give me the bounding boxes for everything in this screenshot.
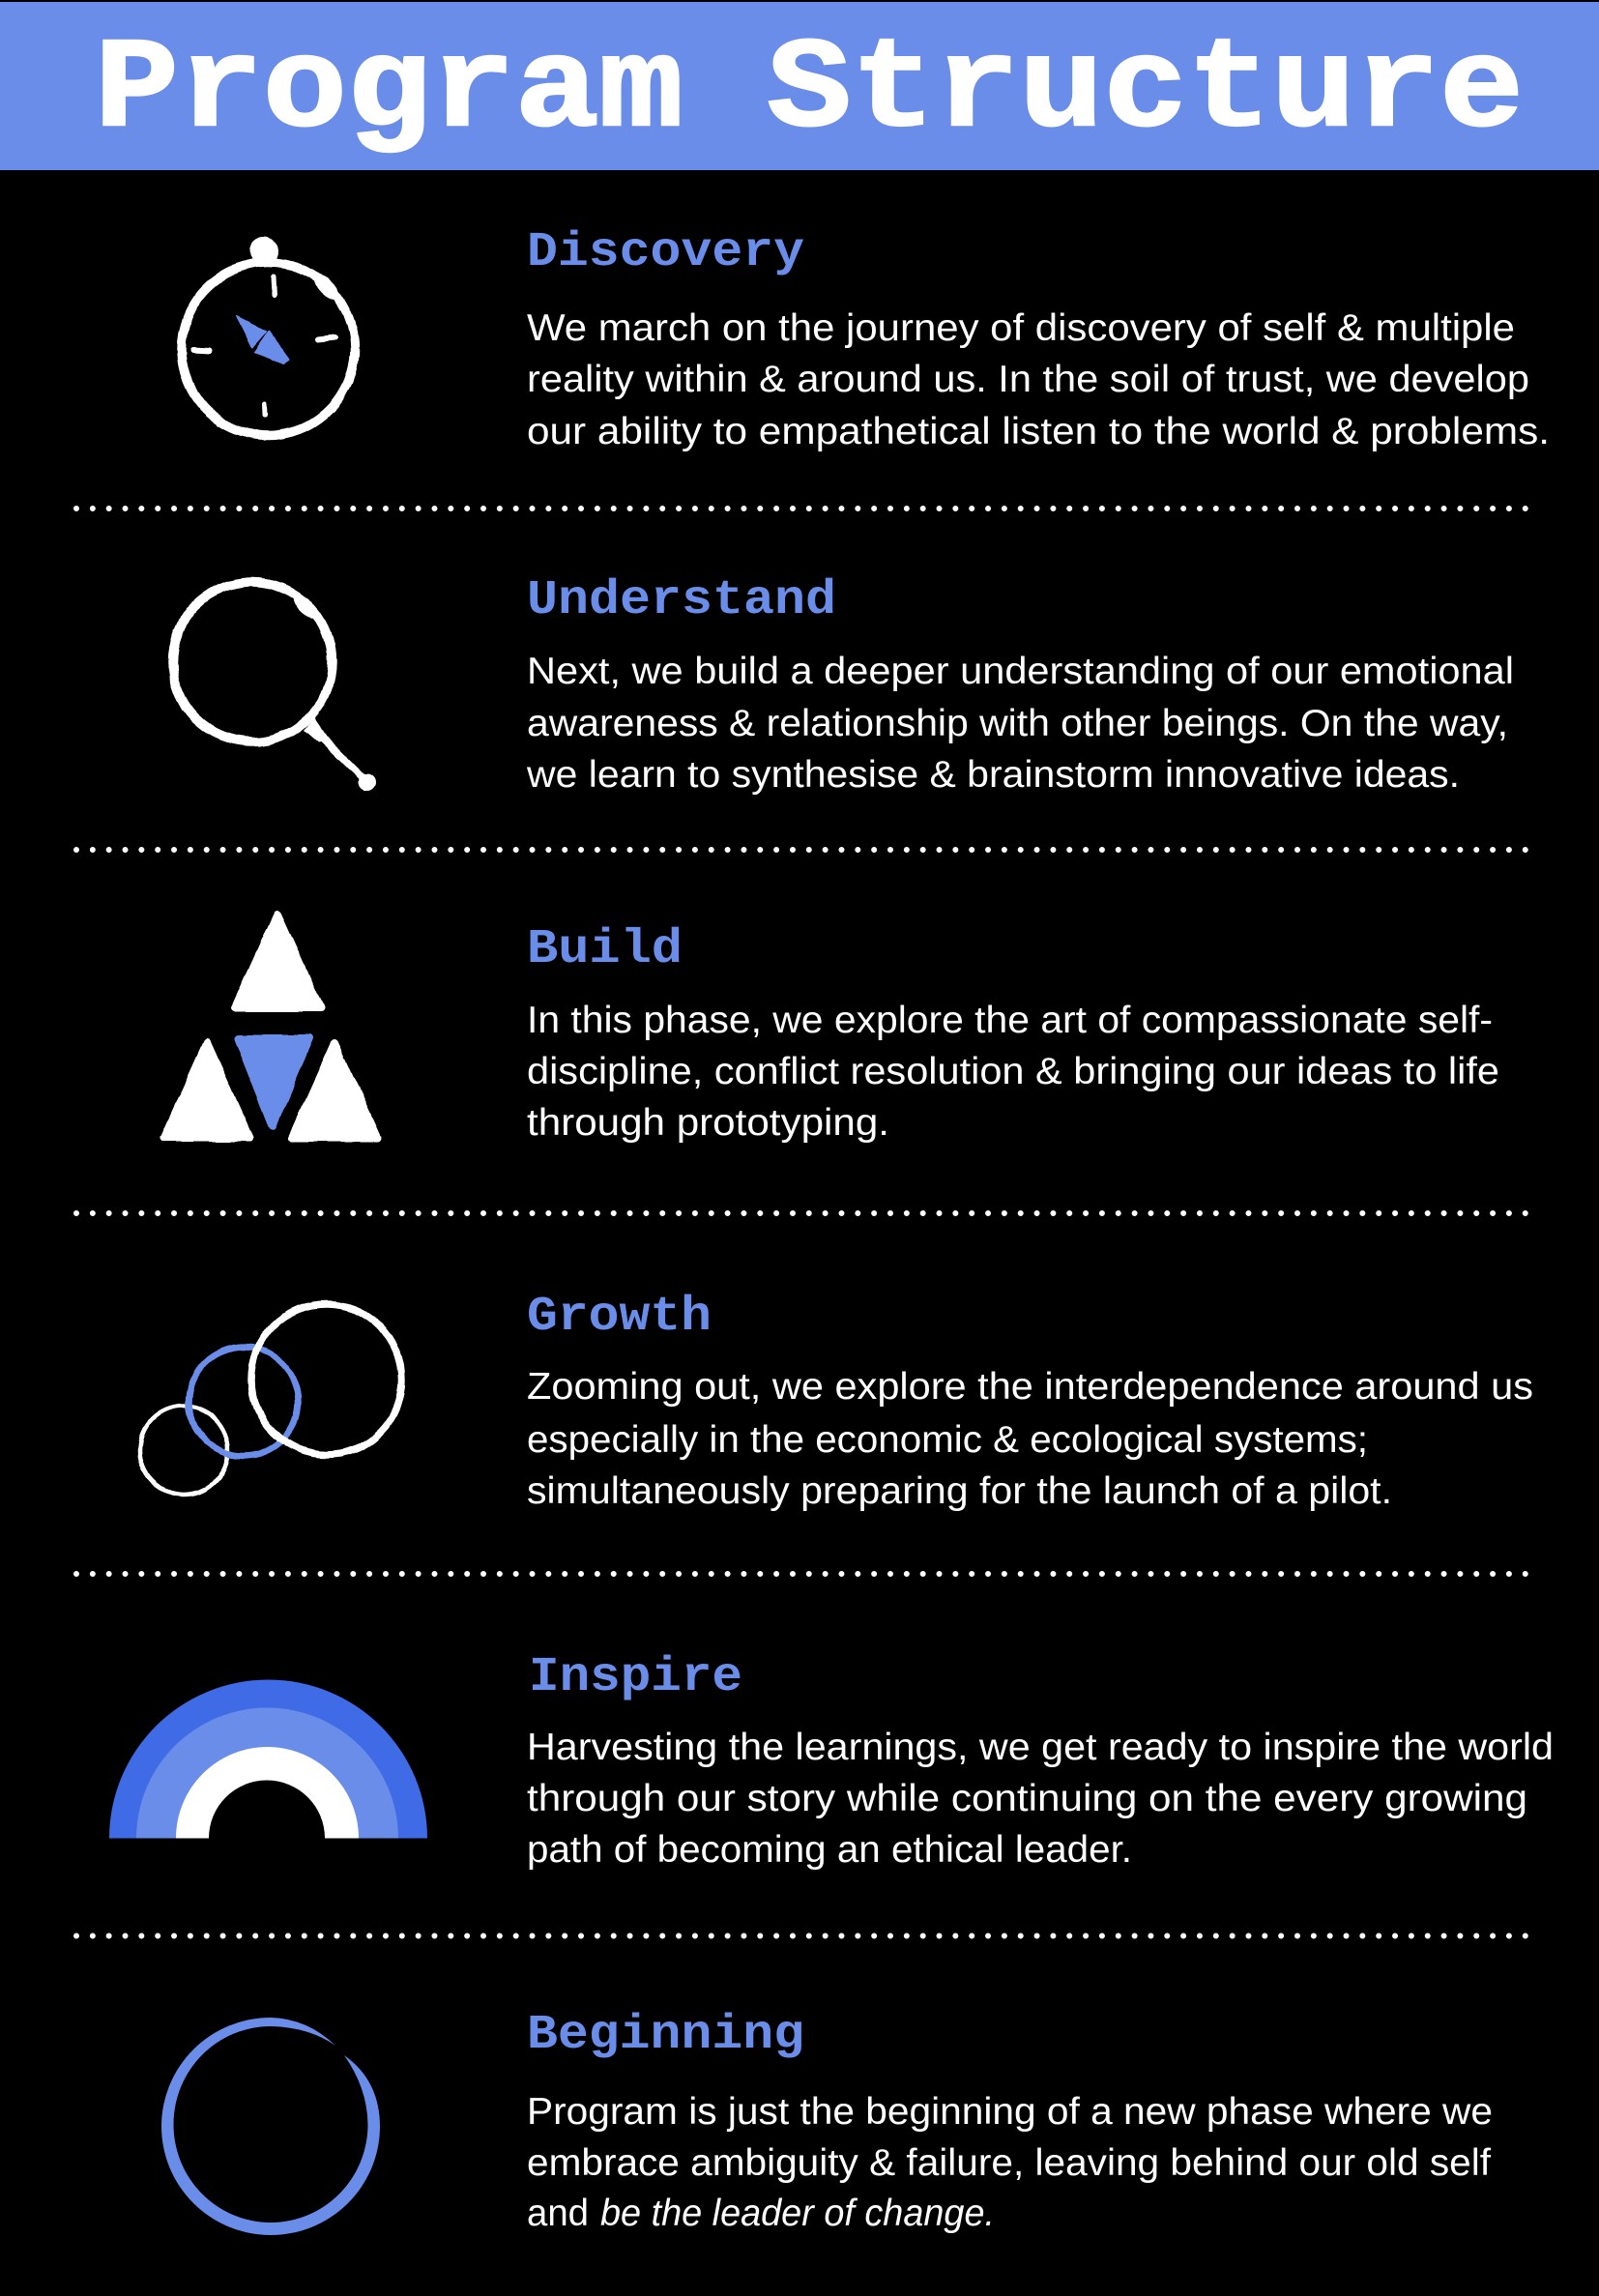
text: discovery description: our ability to empathetical listen to the world & problems. — [527, 411, 1550, 452]
icon: enso circle — [161, 2018, 380, 2235]
text: growth description: simultaneously preparing for the launch of a pilot. — [527, 1470, 1392, 1512]
text: build description: through prototyping. — [527, 1102, 889, 1144]
text: understand description — [526, 651, 1514, 796]
text: build description: discipline, conflict resolution & bringing our ideas to life — [527, 1051, 1499, 1092]
heading: Understand: Understand — [527, 573, 836, 628]
text: inspire description: Harvesting the learnings, we get ready to inspire the world — [527, 1727, 1554, 1768]
text: beginning description: Program is just the beginning of a new phase where we — [527, 2091, 1493, 2133]
heading: Discovery: Discovery — [527, 225, 804, 280]
panel: discovery — [182, 225, 1550, 452]
text: build description: In this phase, we explore the art of compassionate self- — [527, 1000, 1493, 1041]
icon: triangles — [164, 915, 377, 1138]
title banner — [0, 2, 1599, 170]
text: discovery description: We march on the journey of discovery of self & multiple — [527, 307, 1515, 349]
heading: Build: Build — [527, 922, 683, 977]
text: understand description: we learn to synthesise & brainstorm innovative ideas. — [526, 754, 1460, 796]
text: growth description — [527, 1366, 1533, 1512]
text: beginning description: be the leader of change. — [600, 2193, 995, 2234]
text: inspire description: through our story while continuing on the every growing — [527, 1778, 1527, 1819]
text: understand description: awareness & relationship with other beings. On the way, — [527, 703, 1508, 744]
text: beginning description: and — [527, 2193, 589, 2234]
text: discovery description — [527, 307, 1550, 452]
icon: compass — [182, 237, 355, 435]
panel: inspire — [109, 1650, 1554, 1871]
text: beginning description: embrace ambiguity & failure, leaving behind our old self — [527, 2142, 1491, 2184]
text: build description — [527, 1000, 1499, 1144]
heading: Inspire: Inspire — [529, 1650, 742, 1705]
heading: Beginning: Beginning — [527, 2008, 804, 2063]
icon: rainbow — [109, 1680, 427, 1839]
panel: build — [164, 915, 1499, 1144]
text: inspire description — [527, 1727, 1554, 1871]
title: Program Structure — [95, 18, 1524, 163]
panel: growth — [139, 1290, 1533, 1512]
panel: beginning — [161, 2008, 1493, 2235]
panel: understand — [172, 573, 1514, 796]
icon: magnifying glass — [172, 582, 376, 791]
text: beginning description — [527, 2091, 1493, 2234]
heading: Growth: Growth — [527, 1290, 712, 1345]
text: growth description: Zooming out, we explore the interdependence around us — [527, 1366, 1533, 1408]
text: growth description: especially in the economic & ecological systems; — [527, 1419, 1368, 1461]
text: discovery description: reality within & around us. In the soil of trust, we develop — [527, 359, 1529, 400]
icon: overlapping circles — [139, 1304, 402, 1495]
text: understand description: Next, we build a deeper understanding of our emotional — [527, 651, 1514, 692]
text: inspire description: path of becoming an ethical leader. — [527, 1829, 1132, 1871]
